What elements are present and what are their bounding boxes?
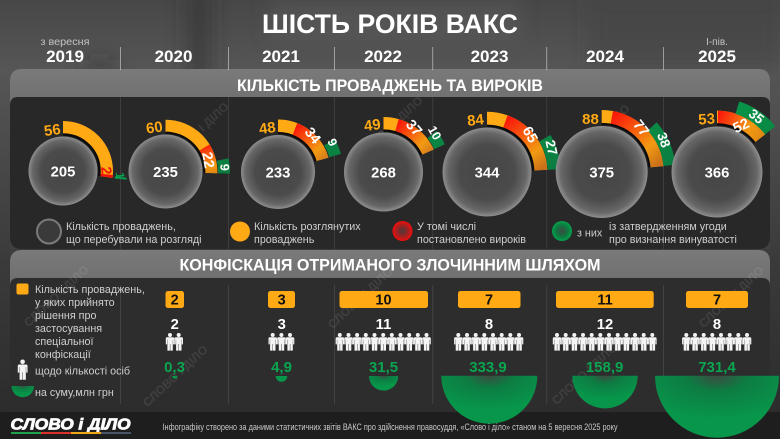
year 2025: 2025 (698, 47, 736, 66)
panel: confiscation (10, 250, 770, 412)
half circle (441, 376, 537, 424)
amount: 158,9 (586, 359, 623, 376)
label 49: 49 (363, 116, 382, 135)
circle 2022: 268 (371, 166, 396, 182)
label 27: 27 (543, 139, 560, 156)
legend text cases: конфіскації (35, 349, 91, 361)
chart 2022 (322, 110, 445, 234)
amount: 333,9 (469, 359, 507, 376)
legend text grey: що перебували на розгляді (66, 234, 202, 246)
legend text plea deal: із затвердженням угоди (609, 221, 727, 233)
circle 2024: 375 (589, 166, 614, 182)
persons count: 2 (171, 317, 179, 333)
watermarks (21, 93, 767, 410)
column 2023 confiscation (553, 291, 657, 408)
half circle (172, 376, 177, 379)
legend green circle (552, 221, 572, 241)
label 53: 53 (698, 110, 716, 129)
legend text persons: щодо кількості осіб (35, 366, 130, 378)
label 38: 38 (654, 130, 674, 150)
people icons (336, 333, 431, 351)
people icons (553, 333, 657, 351)
watermarks: СЛОВО І ДІЛО (562, 101, 633, 169)
badge: 7 (713, 293, 721, 309)
circle 2019: 205 (51, 164, 75, 180)
persons count: 12 (597, 317, 613, 333)
label 65: 65 (519, 124, 540, 146)
circle 2021: 233 (266, 166, 290, 182)
heading: confiscation: КОНФІСКАЦІЯ ОТРИМАНОГО ЗЛОЧИННИМ ШЛЯХОМ (180, 256, 600, 274)
badge: 2 (171, 293, 179, 309)
label 88: 88 (582, 111, 599, 128)
chart 2021 (218, 112, 340, 232)
persons count: 11 (376, 317, 391, 333)
half circle (572, 376, 638, 408)
badge: 10 (375, 293, 392, 309)
label 60: 60 (145, 118, 164, 138)
amount: 4,9 (271, 359, 292, 376)
chart 2024 (534, 104, 674, 240)
persons count: 3 (278, 317, 286, 333)
circle 2023 (442, 128, 532, 216)
chart 2019 (5, 113, 127, 229)
label 9: 9 (217, 164, 232, 171)
legend text cases: спеціальної (35, 336, 93, 348)
legend: confiscation (12, 284, 145, 399)
watermarks: СЛОВО І ДІЛО (161, 99, 232, 167)
year 2023: 2023 (471, 47, 508, 66)
ring arcs 2022 (322, 110, 445, 234)
badge (686, 291, 748, 309)
amount: 0,3 (164, 359, 185, 376)
column 2024 confiscation (655, 291, 779, 438)
year 2021: 2021 (262, 47, 300, 66)
watermarks: СЛОВО І ДІЛО (696, 263, 767, 331)
legend text cases: застосування (35, 323, 102, 335)
legend: proceedings (37, 220, 737, 246)
people icons (268, 333, 294, 351)
timeline of years (40, 37, 736, 66)
half circle (655, 376, 779, 438)
amount: 31,5 (369, 359, 398, 376)
legend orange circle (230, 222, 250, 242)
legend red circle (392, 221, 412, 241)
label 2: 2 (97, 166, 114, 175)
legend text green: з них (577, 228, 603, 240)
legend text orange: проваджень (254, 234, 315, 246)
ring arcs 2025 (650, 104, 780, 240)
column 2021 confiscation (336, 291, 431, 391)
icon: person (18, 360, 28, 380)
column 2019 confiscation (164, 291, 185, 379)
footnote: Інфографіку створено за даними статистичних звітів ВАКС про здійснення правосуддя, «Слово і діло» станом на 5 вересня 2025 року (162, 422, 618, 432)
ring arcs 2020 (107, 113, 224, 230)
persons count: 8 (485, 317, 493, 333)
legend text cases: Кількість проваджень, (35, 284, 145, 296)
chart 2023 (420, 105, 560, 239)
label 34: 34 (301, 125, 323, 147)
amount: 731,4 (698, 359, 736, 376)
half circle (369, 376, 398, 391)
legend text cases: рішення про (35, 310, 96, 322)
chart 2025 (650, 104, 780, 240)
badge: 7 (485, 293, 493, 309)
people icons (166, 333, 183, 351)
footer bar (0, 412, 780, 439)
year 2020: 2020 (155, 47, 192, 66)
watermarks: СЛОВО І ДІЛО (21, 262, 92, 330)
chart 2020 (107, 113, 232, 230)
year 2019: 2019 (46, 47, 84, 66)
legend text cases: у яких прийнято (35, 297, 115, 309)
label 37: 37 (402, 117, 425, 140)
ring arcs 2023 (420, 105, 554, 239)
legend text grey: Кількість проваджень, (66, 221, 176, 233)
label 84: 84 (466, 111, 485, 130)
title: ШІСТЬ РОКІВ ВАКС (262, 9, 518, 39)
ring arcs 2024 (534, 104, 670, 240)
people icons (682, 333, 751, 351)
circle 2025: 366 (705, 166, 729, 182)
label 22: 22 (198, 151, 217, 170)
legend text sum: на суму,млн грн (35, 387, 114, 399)
circle 2020: 235 (153, 165, 178, 181)
ring arcs 2019 (5, 113, 121, 229)
watermarks: СЛОВО І ДІЛО (549, 340, 620, 408)
heading: proceedings: КІЛЬКІСТЬ ПРОВАДЖЕНЬ ТА ВИРОКІВ (237, 77, 543, 95)
note: first half: І-пів. (706, 37, 728, 48)
badge: 11 (597, 293, 613, 309)
year 2022: 2022 (364, 47, 402, 66)
label 10: 10 (425, 123, 444, 143)
legend text orange: Кількість розглянутих (254, 221, 361, 233)
year 2024: 2024 (586, 47, 624, 66)
label 52: 52 (731, 116, 752, 137)
legend text red: У томі числі (417, 221, 476, 233)
people icons (454, 333, 523, 351)
logo: Слово і діло: СЛОВО і ДІЛО (10, 416, 131, 434)
ring arcs 2021 (218, 112, 338, 232)
icon: green half circle (12, 386, 34, 397)
legend grey circle (37, 220, 61, 244)
label 9: 9 (324, 136, 340, 148)
label 77: 77 (629, 117, 652, 140)
legend text red: постановлено вироків (417, 234, 526, 246)
label 56: 56 (43, 121, 62, 140)
persons count: 8 (713, 317, 721, 333)
watermarks: СЛОВО І ДІЛО (325, 264, 396, 332)
legend orange square (16, 284, 28, 294)
half circle (276, 376, 287, 382)
legend text plea deal: про визнання винуватості (609, 234, 737, 246)
column 2020 confiscation (268, 291, 295, 382)
label 48: 48 (258, 119, 277, 138)
watermarks: СЛОВО І ДІЛО (355, 93, 426, 161)
label 1: 1 (113, 172, 127, 180)
watermarks: СЛОВО І ДІЛО (140, 342, 211, 410)
label 35: 35 (746, 106, 767, 127)
note: from September: з вересня (40, 37, 90, 48)
column 2022 confiscation (441, 291, 537, 424)
circle 2023: 344 (475, 166, 500, 182)
badge: 3 (278, 293, 286, 309)
